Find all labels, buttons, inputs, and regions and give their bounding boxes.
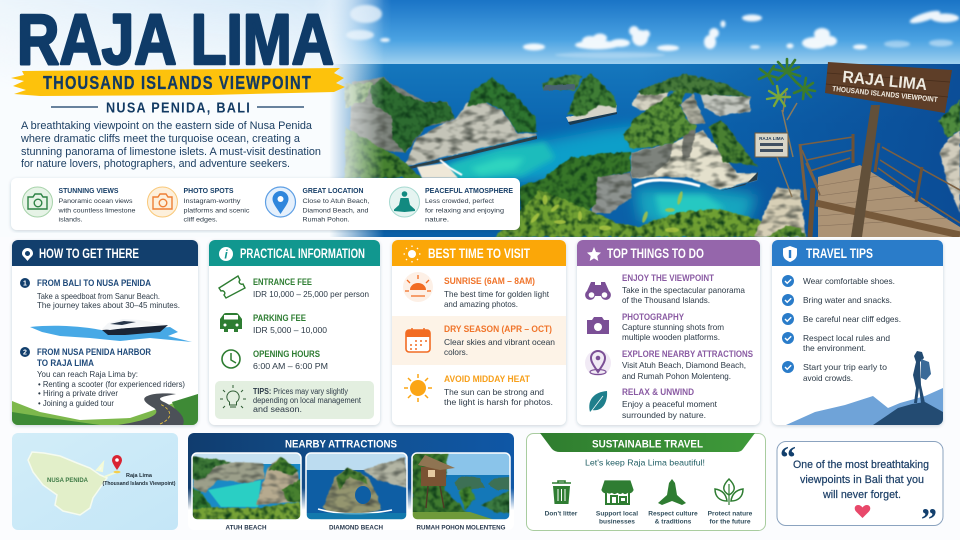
step 2: TO RAJA LIMA	[37, 358, 95, 368]
photo: Diamond Beach	[306, 453, 407, 520]
step 2: You can reach Raja Lima by:	[37, 370, 138, 379]
feature: stunning views	[22, 186, 136, 224]
support local businesses: Support local	[596, 510, 638, 518]
enjoy the viewpoint	[585, 273, 745, 305]
dry season band	[392, 316, 566, 365]
label: Thousand Islands Viewpoint: (Thousand Islands Viewpoint)	[102, 481, 176, 487]
top tint	[0, 0, 388, 70]
opening quote mark: “	[780, 439, 796, 475]
caption: Rumah Pohon Molenteng: RUMAH POHON MOLENTENG	[416, 524, 506, 532]
protect nature: for the future	[709, 518, 751, 526]
explore nearby: EXPLORE NEARBY ATTRACTIONS	[622, 349, 753, 359]
photography: multiple wooden platforms.	[622, 333, 720, 342]
dry season: colors.	[444, 348, 468, 357]
tips box: TIPS: Prices may vary slightly	[253, 387, 348, 396]
panel: travel tips	[772, 240, 943, 425]
opening hours: 6:00 AM – 6:00 PM	[253, 362, 328, 371]
step 1: 1	[23, 280, 27, 288]
tips checklist	[782, 275, 901, 383]
parking fee	[220, 313, 327, 335]
midday heat: The sun can be strong and	[444, 388, 544, 397]
intro paragraph	[20, 120, 321, 170]
heading: HOW TO GET THERE	[39, 246, 139, 261]
respect culture	[648, 479, 698, 526]
islet: right far	[632, 74, 750, 116]
yellow-green leaves	[530, 191, 684, 232]
feature: peaceful atmosphere: Less crowded, perfect	[425, 198, 494, 205]
small notice sign: RAJA LIMA	[759, 136, 785, 141]
step 1: Take a speedboat from Sanur Beach.	[37, 292, 160, 301]
photo: Rumah Pohon Molenteng	[412, 453, 510, 520]
islet and path	[97, 463, 117, 477]
heading: PRACTICAL INFORMATION	[240, 246, 365, 261]
map: Nusa Penida	[12, 433, 178, 530]
tips box: and season.	[253, 405, 302, 414]
tips box	[215, 381, 374, 419]
quote text: viewpoints in Bali that you	[800, 474, 924, 486]
foreground foliage	[495, 190, 770, 237]
panel: sustainable travel	[526, 433, 766, 530]
feature: great location: Diamond Beach, and	[302, 208, 369, 214]
title: RAJA LIMA	[17, 1, 334, 80]
entrance fee	[219, 276, 369, 299]
step 1	[20, 278, 180, 310]
explore nearby	[585, 349, 753, 381]
dry season: DRY SEASON (APR – OCT)	[444, 324, 552, 334]
step 2	[20, 347, 152, 379]
wooden sign: Raja Lima: THOUSAND ISLANDS VIEWPOINT	[832, 84, 939, 104]
icon: shield	[783, 246, 797, 262]
location line: NUSA PENIDA, BALI	[106, 100, 251, 116]
tips checklist: Wear comfortable shoes.	[803, 277, 895, 286]
features strip	[11, 178, 520, 230]
feature: stunning views: islands.	[58, 216, 83, 224]
islet: far	[542, 74, 582, 90]
deck: wooden platform	[800, 134, 960, 237]
respect culture: & traditions	[655, 518, 692, 526]
feature: stunning views: with countless limestone	[57, 208, 136, 214]
parking fee: PARKING FEE	[253, 313, 306, 323]
relax and unwind: Enjoy a peaceful moment	[622, 400, 718, 409]
subtitle banner: THOUSAND ISLANDS VIEWPOINT	[43, 72, 312, 93]
photo: Atuh Beach	[192, 453, 301, 520]
tips checklist: the environment.	[803, 344, 866, 353]
transport options list: • Renting a scooter (for experienced riders)	[38, 380, 185, 389]
wooden sign: Raja Lima: RAJA LIMA	[842, 68, 928, 94]
caption: Atuh Beach: ATUH BEACH	[226, 524, 267, 532]
quote text	[793, 459, 929, 501]
tips checklist: avoid crowds.	[803, 374, 853, 383]
enjoy the viewpoint: Take in the spectacular panorama	[622, 286, 745, 295]
icon: heart	[855, 505, 870, 518]
wooden sign: Raja Lima	[825, 62, 952, 113]
small notice sign	[755, 133, 792, 197]
panel: best time to visit	[392, 240, 566, 425]
surf at beach	[440, 160, 462, 175]
feature: peaceful atmosphere	[390, 186, 513, 224]
protect nature: Protect nature	[708, 510, 753, 518]
intro paragraph: for nature lovers, photographers, and adventure seekers.	[21, 158, 290, 170]
panel: how to get there	[12, 240, 198, 425]
label: Raja Lima: Raja Lima	[126, 473, 153, 479]
icon: info	[219, 247, 233, 262]
island: left headland	[345, 78, 537, 178]
feature: peaceful atmosphere: for relaxing and enjoying	[425, 208, 504, 214]
right cliff	[938, 100, 960, 213]
feature: stunning views: Panoramic ocean views	[58, 198, 133, 205]
midday heat: AVOID MIDDAY HEAT	[444, 374, 531, 384]
hero photo: coastline viewpoint	[332, 0, 960, 237]
don't litter	[545, 481, 578, 518]
turquoise shallows	[440, 125, 640, 185]
quote text: One of the most breathtaking	[793, 459, 929, 471]
mountains and hiker	[786, 351, 943, 425]
transport options list: • Hiring a private driver	[38, 389, 118, 398]
ocean	[332, 64, 960, 237]
midday heat: the light is harsh for photos.	[444, 398, 553, 407]
photography: Capture stunning shots from	[622, 323, 724, 332]
tips checklist: Be careful near cliff edges.	[803, 315, 901, 324]
step 2: FROM NUSA PENIDA HARBOR	[37, 347, 152, 357]
relax and unwind	[589, 387, 718, 420]
heading: NEARBY ATTRACTIONS	[285, 438, 397, 450]
caption: Diamond Beach: DIAMOND BEACH	[329, 524, 383, 532]
heading: BEST TIME TO VISIT	[428, 246, 531, 261]
photography	[587, 312, 724, 342]
icon: sun header	[404, 246, 420, 262]
feature: great location: Rumah Pohon.	[302, 216, 350, 224]
panel: top things to do	[577, 240, 760, 425]
explore nearby: Visit Atuh Beach, Diamond Beach,	[622, 361, 746, 370]
panel: nearby attractions	[188, 433, 514, 532]
tips box: depending on local management	[253, 396, 362, 405]
island shape	[28, 452, 107, 515]
feature: photo spots: platforms and scenic	[184, 208, 250, 214]
relax and unwind: surrounded by nature.	[622, 411, 706, 420]
feature: great location: Close to Atuh Beach,	[302, 198, 370, 205]
enjoy the viewpoint: of the Thousand Islands.	[622, 296, 710, 305]
sunrise: SUNRISE (6AM – 8AM)	[444, 276, 535, 286]
feature: great location	[266, 186, 370, 224]
photography: PHOTOGRAPHY	[622, 312, 684, 322]
feature: photo spots	[148, 186, 250, 224]
midday heat	[404, 374, 553, 407]
label: Nusa Penida: NUSA PENIDA	[47, 477, 88, 484]
feature: great location: GREAT LOCATION	[302, 186, 364, 195]
island: main cliff	[623, 88, 758, 191]
islet: centre	[566, 74, 617, 125]
speedboat illustration	[30, 319, 192, 342]
beach	[417, 163, 458, 178]
feature: peaceful atmosphere: nature.	[425, 216, 449, 224]
palm tree	[759, 59, 815, 157]
explore nearby: and Rumah Pohon Molenteng.	[622, 372, 731, 381]
transport options list	[38, 380, 185, 408]
header ribbon	[540, 433, 755, 452]
sunrise: and amazing photos.	[444, 300, 518, 309]
support local businesses	[596, 481, 638, 526]
step 1: The journey takes about 30–45 minutes.	[37, 301, 180, 310]
subtitle banner	[11, 68, 345, 96]
feature: peaceful atmosphere: PEACEFUL ATMOSPHERE	[425, 186, 513, 195]
left white fade	[0, 0, 392, 237]
icon: star	[587, 247, 601, 261]
quote text: will never forget.	[822, 489, 901, 501]
tips checklist: Bring water and snacks.	[803, 296, 892, 305]
tips checklist: Respect local rules and	[803, 334, 890, 343]
opening hours	[222, 349, 328, 371]
step 2: 2	[23, 350, 27, 356]
respect culture: Respect culture	[648, 510, 698, 518]
tagline: Let's keep Raja Lima beautiful!	[585, 458, 705, 468]
protect nature	[708, 479, 753, 526]
panel: practical information	[209, 240, 380, 425]
clouds	[346, 5, 959, 58]
sky	[334, 0, 960, 64]
sunrise	[403, 272, 550, 309]
intro paragraph: A breathtaking viewpoint on the eastern side of Nusa Penida	[21, 120, 313, 132]
heading: SUSTAINABLE TRAVEL	[592, 438, 703, 450]
closing quote mark: ”	[921, 501, 937, 537]
callout: quote	[777, 439, 943, 537]
opening hours: OPENING HOURS	[253, 349, 320, 359]
sign post	[851, 105, 880, 237]
don't litter: Don't litter	[545, 510, 578, 518]
surf	[634, 180, 700, 186]
entrance fee: ENTRANCE FEE	[253, 277, 312, 287]
intro paragraph: where dramatic cliffs meet the turquoise ocean, creating a	[20, 133, 301, 145]
icon: pin	[22, 248, 33, 261]
parking fee: IDR 5,000 – 10,000	[253, 326, 327, 335]
relax and unwind: RELAX & UNWIND	[622, 387, 694, 397]
feature: photo spots: PHOTO SPOTS	[184, 186, 234, 195]
heading: TOP THINGS TO DO	[607, 246, 704, 261]
heading: TRAVEL TIPS	[806, 246, 873, 261]
icon: info: i	[224, 248, 228, 262]
transport options list: • Joining a guided tour	[38, 399, 114, 408]
sunrise: The best time for golden light	[444, 290, 550, 299]
enjoy the viewpoint: ENJOY THE VIEWPOINT	[622, 273, 715, 283]
support local businesses: businesses	[599, 518, 635, 526]
feature: stunning views: STUNNING VIEWS	[58, 186, 119, 195]
intro paragraph: stunning panorama of limestone islets. A must-visit destination	[21, 146, 321, 158]
feature: photo spots: Instagram-worthy	[184, 198, 241, 205]
entrance fee: IDR 10,000 – 25,000 per person	[253, 290, 369, 299]
dry season	[406, 324, 555, 357]
tips checklist: Start your trip early to	[803, 363, 887, 372]
road landscape	[12, 393, 198, 425]
dry season: Clear skies and vibrant ocean	[444, 338, 555, 347]
right rock under deck	[755, 187, 806, 237]
feature: photo spots: cliff edges.	[184, 216, 218, 224]
step 1: FROM BALI TO NUSA PENIDA	[37, 278, 152, 288]
icon: map pin	[112, 455, 122, 473]
foreground cliff	[520, 150, 633, 214]
